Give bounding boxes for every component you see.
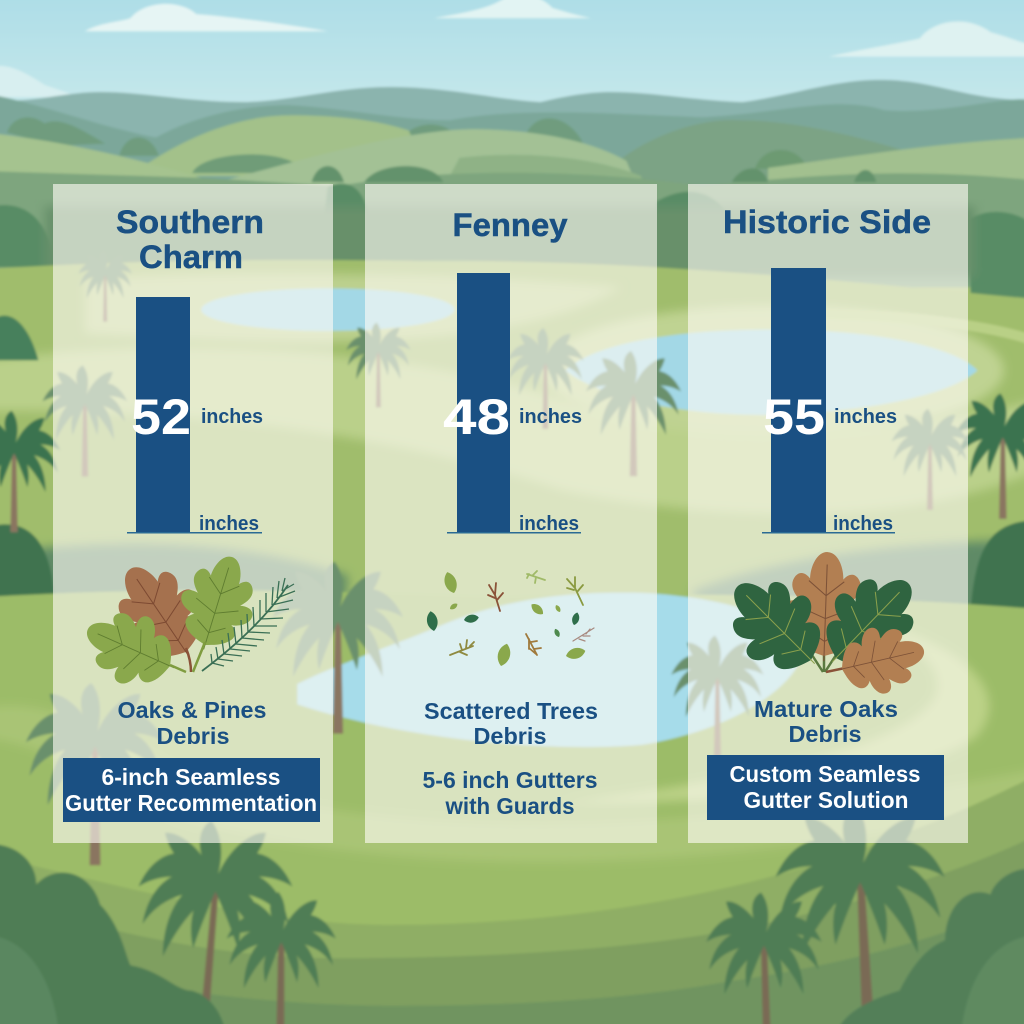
icon: mature oak leaves	[708, 551, 938, 703]
label: debris type: Mature Oaks	[754, 696, 898, 722]
text: gutter recommendation: 5-6 inch Gutters	[422, 767, 598, 793]
label: debris type: Oaks & Pines	[118, 697, 266, 723]
label: debris type: Debris	[788, 721, 862, 747]
heading: Historic Side: Historic Side	[723, 204, 931, 240]
heading: Fenney: Fenney	[452, 207, 568, 243]
callout: gutter recommendation: Gutter Recommentation	[65, 790, 317, 816]
callout: gutter recommendation	[63, 758, 320, 822]
bar chart: 55 inches: 55	[763, 389, 825, 445]
label: debris type: Debris	[474, 723, 546, 749]
text: gutter recommendation: with Guards	[445, 793, 574, 819]
bar chart: 48 inches: inches	[519, 406, 582, 428]
bar chart: 52 inches: inches	[199, 513, 259, 535]
ground bands	[0, 773, 1024, 1024]
bar chart: 52 inches	[127, 297, 263, 535]
bar chart: 55 inches	[762, 268, 897, 535]
text: gutter recommendation	[422, 767, 598, 819]
bar chart: 52 inches: 52	[131, 389, 191, 445]
panel: Fenney	[365, 184, 657, 843]
label: debris type	[424, 698, 598, 749]
bar chart: 55 inches: inches	[834, 406, 897, 428]
bar chart: 52 inches: inches	[201, 406, 263, 428]
heading: Southern Charm: Charm	[139, 239, 243, 275]
heading: Southern Charm	[116, 204, 264, 275]
panel: Southern Charm	[53, 184, 333, 843]
distant palms	[0, 251, 1024, 865]
bar chart: 55 inches: inches	[833, 513, 893, 535]
bar chart: 48 inches: 48	[443, 389, 510, 445]
callout: gutter recommendation: 6-inch Seamless	[102, 764, 280, 790]
foreground palms and bushes	[0, 804, 1024, 1024]
icon: oak and pine leaves	[73, 546, 295, 701]
label: debris type: Scattered Trees	[424, 698, 598, 724]
label: debris type: Debris	[156, 723, 230, 749]
panel: Historic Side	[688, 184, 968, 843]
heading: Southern Charm: Southern	[116, 204, 264, 240]
callout: gutter solution	[707, 755, 944, 820]
bar chart: 48 inches	[443, 273, 582, 535]
icon: scattered leaves and twigs	[425, 570, 594, 668]
label: debris type	[118, 697, 266, 749]
callout: gutter solution: Gutter Solution	[744, 787, 908, 813]
label: debris type	[754, 696, 898, 747]
bar chart: 48 inches: inches	[519, 513, 579, 535]
callout: gutter solution: Custom Seamless	[730, 761, 920, 787]
